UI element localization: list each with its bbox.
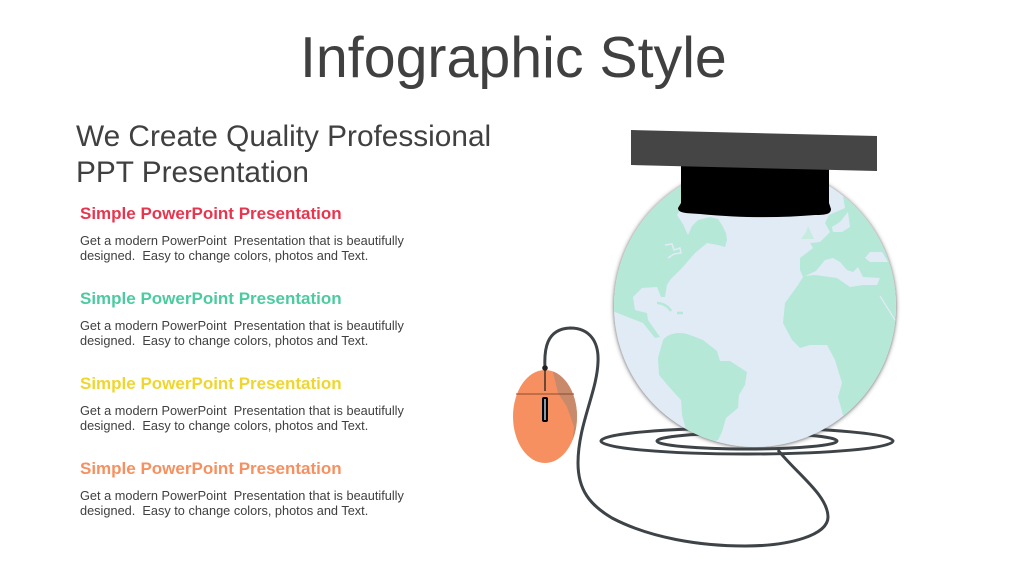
text block: orange item: Get a modern PowerPoint Presentation that is beautifully	[80, 488, 404, 502]
text block: red item: Get a modern PowerPoint Presentation that is beautifully	[80, 232, 404, 248]
text block: orange item: Simple PowerPoint Presentation	[80, 459, 342, 478]
Africa and Eurasia	[783, 196, 896, 415]
Great Lakes	[665, 244, 681, 258]
cap board	[631, 130, 877, 171]
Mediterranean Sea	[805, 258, 880, 287]
mouse button line	[516, 393, 574, 395]
mouse	[513, 365, 577, 463]
Baltic Sea	[832, 212, 850, 232]
globe	[610, 182, 900, 451]
text block: red item	[80, 204, 404, 263]
text block: red item: Simple PowerPoint Presentation	[80, 204, 342, 223]
text block: green item	[80, 289, 404, 348]
text block: green item: Simple PowerPoint Presentation	[80, 289, 342, 308]
UK	[801, 226, 814, 239]
subheading	[76, 120, 491, 189]
Red Sea	[880, 296, 895, 320]
title: Infographic Style	[300, 26, 727, 90]
text block: red item: designed. Easy to change colors, photos and Text.	[80, 248, 368, 263]
subheading: We Create Quality Professional	[76, 120, 491, 153]
scroll wheel	[543, 398, 547, 421]
text block: orange item: designed. Easy to change colors, photos and Text.	[80, 503, 368, 518]
stand rings	[601, 428, 893, 454]
text block: yellow item	[80, 374, 404, 433]
text block: yellow item: Simple PowerPoint Presentation	[80, 374, 342, 393]
South America	[658, 333, 747, 442]
Black Sea	[865, 252, 888, 262]
mouse body	[513, 370, 577, 463]
North America	[614, 186, 727, 338]
mouse shaded area	[552, 371, 577, 440]
text block: yellow item: Get a modern PowerPoint Presentation that is beautifully	[80, 402, 404, 418]
text block: yellow item: designed. Easy to change colors, photos and Text.	[80, 418, 368, 433]
Caribbean islands	[657, 303, 683, 313]
mouse cable	[545, 328, 828, 546]
illustration: globe, cap and mouse	[513, 130, 900, 548]
text block: orange item	[80, 459, 404, 518]
text block: green item: designed. Easy to change colors, photos and Text.	[80, 333, 368, 348]
text block: green item: Get a modern PowerPoint Presentation that is beautifully	[80, 318, 404, 332]
cap crown	[678, 160, 831, 217]
graduation cap	[631, 130, 877, 217]
subheading: PPT Presentation	[76, 156, 309, 189]
